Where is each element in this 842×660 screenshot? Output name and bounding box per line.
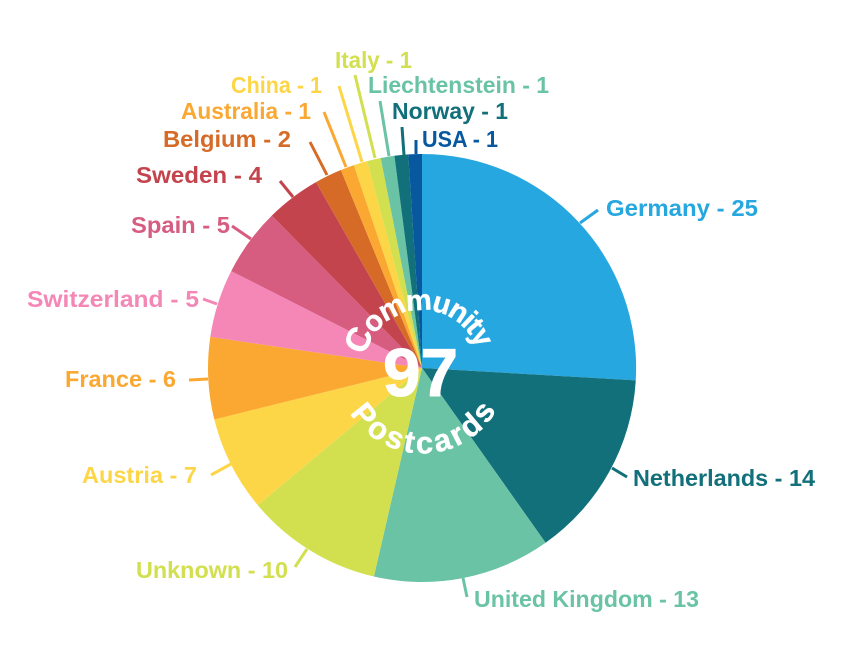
label: Austria: Austria - 7 [82,462,197,488]
arc text: Community: Community [346,294,492,352]
pie chart [208,154,636,582]
label: Australia: Australia - 1 [181,98,311,124]
slice: Austria 7 [214,368,422,505]
center title: Community 97 Postcards [346,294,494,454]
label: France: France - 6 [65,366,176,392]
slice: Italy 1 [367,158,422,368]
label: Liechtenstein [368,72,549,156]
slice: Spain 5 [231,216,422,368]
slice: Netherlands 14 [422,368,636,543]
label: Italy: Italy - 1 [335,47,412,73]
slice: Unknown 10 [258,368,422,576]
label: Norway: Norway - 1 [392,98,508,124]
label: Norway [392,98,508,155]
label: Sweden: Sweden - 4 [136,162,262,188]
slice: United Kingdom 13 [374,368,546,582]
label: Netherlands: Netherlands - 14 [633,465,815,491]
label: USA: USA - 1 [422,126,498,152]
slice: Germany 25 [422,154,636,380]
slice: Norway 1 [394,154,422,368]
slice: France 6 [208,337,422,420]
label: Germany: Germany - 25 [606,195,758,221]
total number 97: 97 [383,335,458,411]
slice: USA 1 [408,154,422,368]
label: Liechtenstein: Liechtenstein - 1 [368,72,549,98]
slice: Sweden 4 [272,182,422,368]
slice: Australia 1 [341,165,422,368]
label: Spain: Spain - 5 [131,212,230,238]
label: China [231,72,362,162]
slice: Switzerland 5 [210,271,422,368]
slice: China 1 [354,161,422,368]
label: Australia [181,98,346,167]
label: United Kingdom: United Kingdom - 13 [474,586,699,612]
label: Belgium [163,126,327,175]
label: Italy [335,47,412,158]
slice: Belgium 2 [316,170,422,368]
label: Unknown [136,549,307,583]
label: Belgium: Belgium - 2 [163,126,291,152]
label: China: China - 1 [231,72,322,98]
arc text: Postcards: Postcards [350,401,494,454]
label: Switzerland: Switzerland - 5 [27,286,199,312]
label: Unknown: Unknown - 10 [136,557,288,583]
slice: Liechtenstein 1 [381,156,422,368]
label: Sweden [136,162,293,197]
